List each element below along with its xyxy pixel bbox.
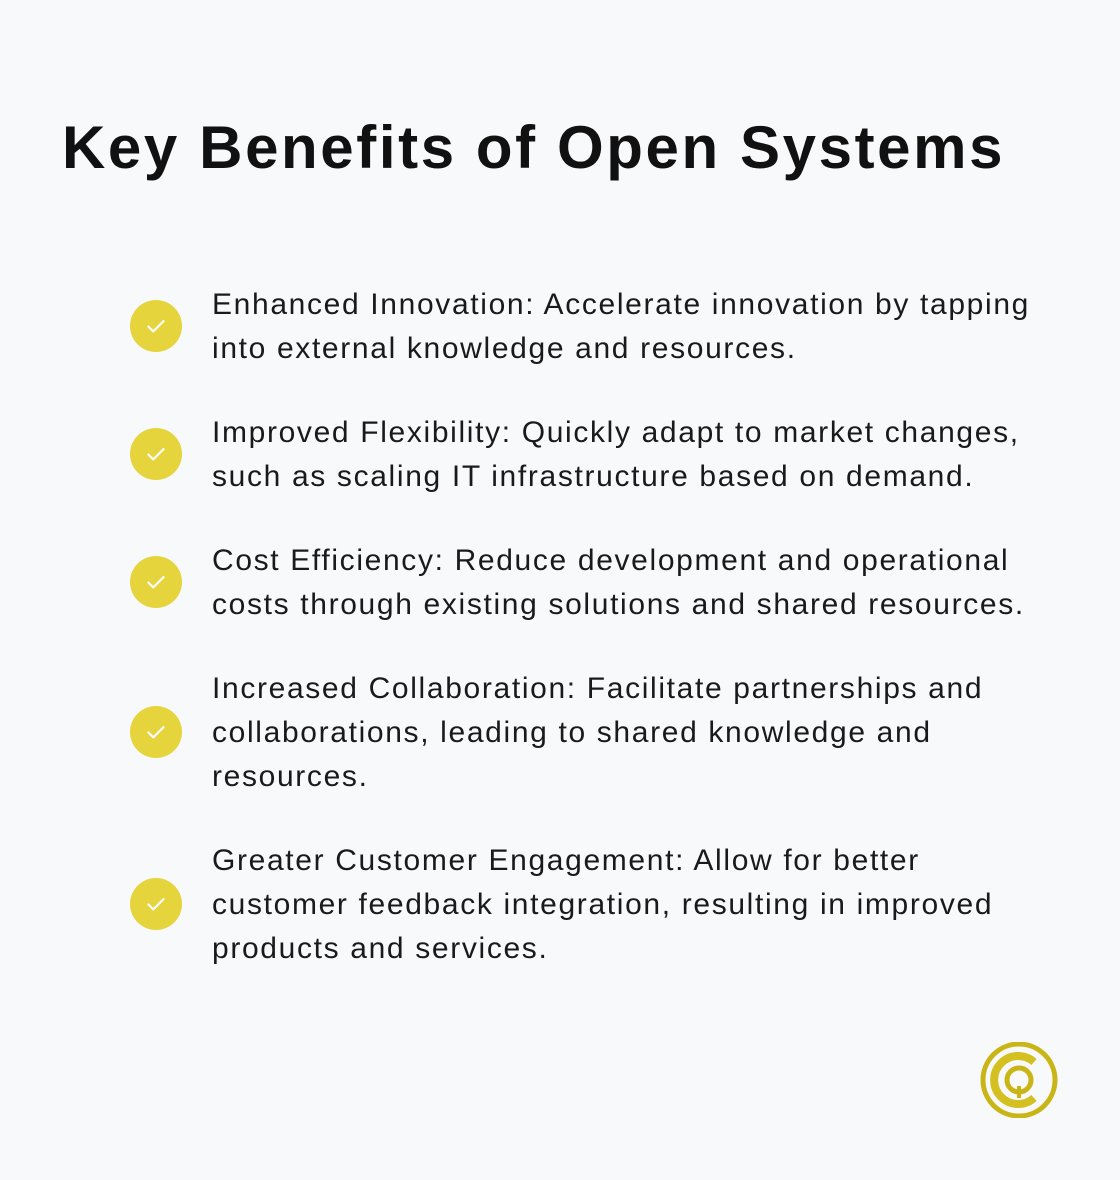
text: enhanced innovation [212, 288, 1030, 365]
text: cost efficiency: costs through existing solutions and shared resources. [212, 588, 1025, 621]
text: improved flexibility: such as scaling IT infrastructure based on demand. [212, 460, 974, 493]
icon: check 2 [130, 428, 182, 480]
text: increased collaboration [212, 672, 983, 793]
text: customer engagement: products and services. [212, 932, 548, 965]
logo [980, 1042, 1058, 1118]
icon: check 1 [130, 300, 182, 352]
text: cost efficiency [212, 544, 1025, 621]
icon: check 5 [130, 878, 182, 930]
text: improved flexibility [212, 416, 1020, 493]
text: cost efficiency: Cost Efficiency: Reduce development and operational [212, 544, 1009, 577]
title: Key Benefits of Open Systems [62, 114, 1005, 181]
text: customer engagement [212, 844, 993, 965]
text: enhanced innovation: into external knowledge and resources. [212, 332, 797, 365]
icon: check 3 [130, 556, 182, 608]
text: improved flexibility: Improved Flexibility: Quickly adapt to market changes, [212, 416, 1020, 449]
text: customer engagement: Greater Customer Engagement: Allow for better [212, 844, 920, 877]
text: increased collaboration: collaborations, leading to shared knowledge and [212, 716, 932, 749]
text: customer engagement: customer feedback integration, resulting in improved [212, 888, 993, 921]
text: increased collaboration: Increased Collaboration: Facilitate partnerships and [212, 672, 983, 705]
text: increased collaboration: resources. [212, 760, 369, 793]
icon: check 4 [130, 706, 182, 758]
text: enhanced innovation: Enhanced Innovation: Accelerate innovation by tapping [212, 288, 1030, 321]
